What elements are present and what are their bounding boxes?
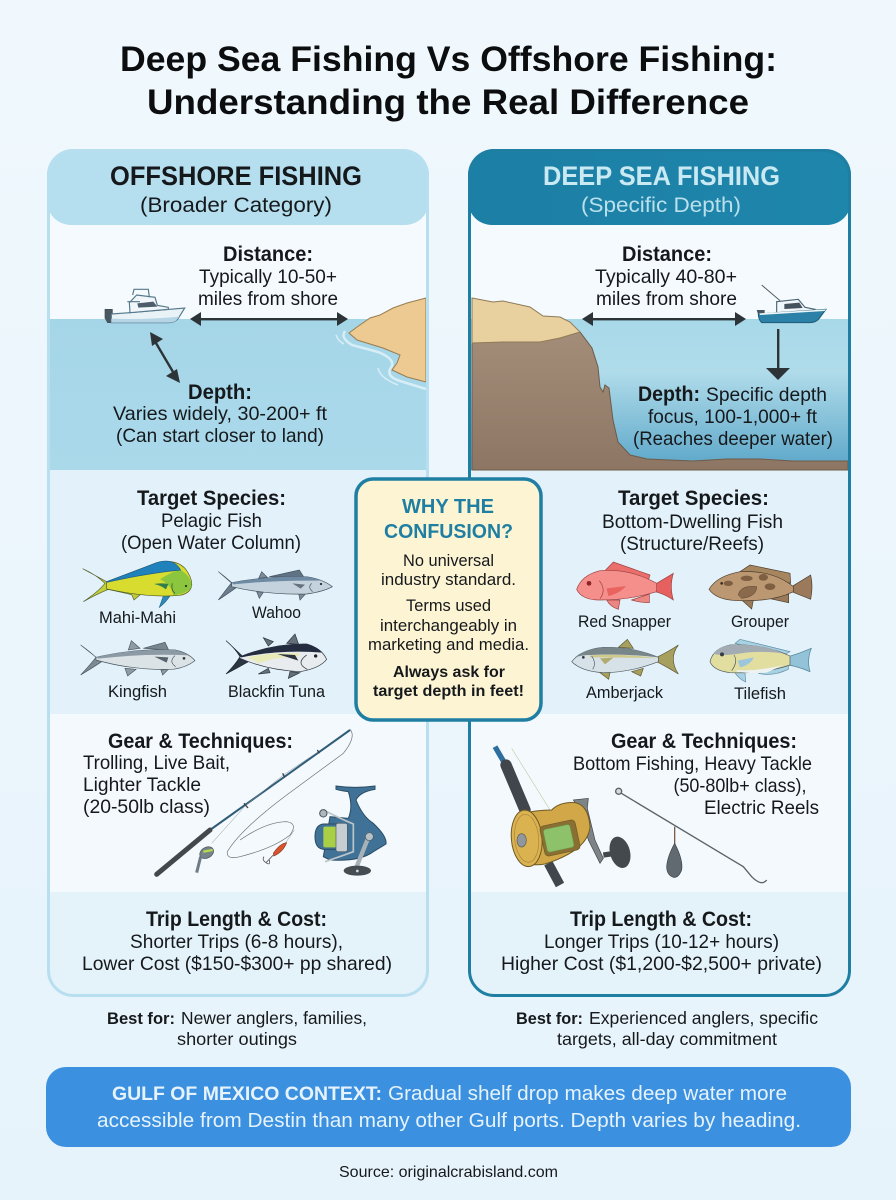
- icon: shoreline: [336, 298, 426, 389]
- title: Understanding the Real Difference: [147, 83, 749, 122]
- callout: why the confusion: interchangeably in: [380, 616, 517, 635]
- deep sea header: (Specific Depth): [581, 194, 741, 217]
- icon: fishing rod and lure: [157, 729, 352, 874]
- text: best for deep sea: Best for:: [516, 1009, 583, 1028]
- text: offshore trip length and cost: Lower Cost ($150-$300+ pp shared): [82, 953, 392, 975]
- text: offshore distance: Typically 10-50+: [199, 266, 337, 288]
- text: offshore fish labels: Blackfin Tuna: [228, 683, 326, 701]
- icon: red snapper: [577, 562, 673, 609]
- text: offshore target species: [121, 487, 301, 554]
- text: deep sea target species: Bottom-Dwelling Fish: [602, 511, 783, 533]
- banner: gulf of mexico context: accessible from Destin than many other Gulf ports. Depth varies by heading.: [97, 1109, 801, 1132]
- icon: amberjack: [572, 639, 678, 679]
- text: best for deep sea: Experienced anglers, specific: [589, 1008, 818, 1028]
- text: offshore distance: miles from shore: [198, 288, 338, 310]
- text: deep sea trip length and cost: Longer Trips (10-12+ hours): [544, 931, 779, 953]
- text: deep sea fish labels: Amberjack: [586, 684, 664, 702]
- text: deep sea fish labels: [578, 613, 789, 703]
- text: offshore depth: Varies widely, 30-200+ ft: [113, 403, 328, 425]
- icon: grouper: [709, 565, 812, 609]
- text: offshore depth: [113, 381, 328, 447]
- text: offshore target species: Pelagic Fish: [161, 510, 262, 532]
- text: best for offshore: Best for:: [107, 1009, 175, 1028]
- text: deep sea target species: (Structure/Reefs): [620, 533, 764, 555]
- callout: why the confusion: No universal: [403, 551, 494, 570]
- text: deep sea gear: Gear & Techniques:: [611, 730, 797, 753]
- text: deep sea fish labels: Grouper: [731, 613, 789, 631]
- source: Source: originalcrabisland.com: [339, 1164, 558, 1181]
- text: deep sea fish labels: Red Snapper: [578, 613, 671, 631]
- callout: why the confusion: WHY THE: [402, 496, 494, 518]
- icon: conventional reel and rod: [495, 747, 634, 885]
- text: deep sea fish labels: Tilefish: [734, 685, 786, 703]
- banner: gulf of mexico context: GULF OF MEXICO CONTEXT:: [112, 1083, 382, 1105]
- callout: why the confusion: Always ask for: [393, 664, 505, 681]
- text: offshore gear: Lighter Tackle: [83, 774, 201, 796]
- arrow: deep sea distance: [582, 312, 746, 326]
- banner: gulf of mexico context: Gradual shelf drop makes deep water more: [388, 1082, 787, 1105]
- text: best for offshore: Newer anglers, families,: [181, 1008, 367, 1028]
- text: deep sea gear: Electric Reels: [704, 797, 819, 819]
- text: deep sea depth: Specific depth: [706, 384, 827, 406]
- text: offshore fish labels: Kingfish: [108, 683, 167, 701]
- text: offshore fish labels: [99, 604, 326, 701]
- title: [120, 40, 777, 122]
- icon: wahoo: [218, 570, 332, 600]
- icon: offshore boat: [105, 289, 185, 323]
- deep sea header: DEEP SEA FISHING: [543, 161, 780, 191]
- text: deep sea trip length and cost: Higher Cost ($1,200-$2,500+ private): [501, 953, 822, 975]
- icon: tilefish: [710, 639, 811, 682]
- callout: why the confusion: marketing and media.: [368, 635, 529, 654]
- text: deep sea distance: miles from shore: [596, 288, 737, 310]
- text: deep sea target species: [602, 487, 783, 555]
- icon: continental shelf: [472, 298, 848, 470]
- text: offshore trip length and cost: [82, 908, 392, 975]
- banner: gulf of mexico context: [46, 1067, 851, 1147]
- text: offshore trip length and cost: Trip Length & Cost:: [146, 908, 327, 931]
- text: deep sea distance: Typically 40-80+: [595, 266, 737, 288]
- text: deep sea gear: Bottom Fishing, Heavy Tackle: [573, 753, 812, 775]
- text: offshore gear: (20-50lb class): [83, 796, 210, 818]
- icon: sinker rig: [616, 788, 767, 883]
- text: best for offshore: [107, 1008, 367, 1049]
- text: deep sea depth: (Reaches deeper water): [633, 428, 833, 450]
- text: deep sea gear: (50-80lb+ class),: [674, 775, 806, 797]
- text: offshore depth: (Can start closer to land): [116, 425, 324, 447]
- panel: offshore fishing: [47, 149, 429, 997]
- text: offshore depth: Depth:: [188, 381, 252, 404]
- icon: deep sea boat: [757, 285, 826, 323]
- text: deep sea depth: Depth:: [638, 383, 700, 406]
- callout: why the confusion: industry standard.: [381, 570, 516, 589]
- text: offshore fish labels: Wahoo: [252, 604, 301, 622]
- callout: why the confusion: [356, 479, 541, 720]
- offshore header: (Broader Category): [140, 194, 332, 217]
- text: deep sea depth: focus, 100-1,000+ ft: [648, 406, 818, 428]
- text: offshore fish labels: Mahi-Mahi: [99, 609, 176, 627]
- offshore header: [47, 149, 429, 225]
- icon: blackfin tuna: [226, 634, 327, 678]
- icon: kingfish: [81, 641, 195, 676]
- arrow: offshore depth: [150, 332, 180, 383]
- text: best for deep sea: targets, all-day commitment: [557, 1029, 777, 1049]
- text: offshore target species: (Open Water Column): [121, 532, 301, 554]
- callout: why the confusion: Terms used: [406, 596, 491, 615]
- text: best for offshore: shorter outings: [177, 1029, 297, 1049]
- offshore header: OFFSHORE FISHING: [110, 161, 362, 191]
- text: offshore trip length and cost: Shorter Trips (6-8 hours),: [130, 931, 343, 953]
- arrow: offshore distance: [190, 312, 348, 326]
- text: deep sea depth: [633, 383, 833, 450]
- text: deep sea trip length and cost: [501, 908, 822, 975]
- panel: deep sea fishing: [468, 149, 851, 997]
- text: offshore distance: [198, 243, 338, 310]
- text: deep sea gear: [573, 730, 819, 819]
- icon: spinning reel: [315, 786, 386, 876]
- text: deep sea trip length and cost: Trip Length & Cost:: [570, 908, 752, 931]
- deep sea header: [468, 149, 851, 225]
- text: best for deep sea: [516, 1008, 818, 1049]
- text: offshore distance: Distance:: [223, 243, 313, 266]
- text: deep sea distance: [595, 243, 737, 310]
- text: offshore gear: [83, 730, 293, 818]
- callout: why the confusion: target depth in feet!: [373, 683, 524, 700]
- title: Deep Sea Fishing Vs Offshore Fishing:: [120, 40, 777, 79]
- text: deep sea target species: Target Species:: [618, 487, 769, 510]
- callout: why the confusion: CONFUSION?: [384, 521, 513, 543]
- text: offshore target species: Target Species:: [137, 487, 286, 510]
- text: deep sea distance: Distance:: [622, 243, 712, 266]
- text: offshore gear: Trolling, Live Bait,: [83, 752, 230, 774]
- icon: mahi-mahi: [83, 561, 192, 607]
- text: offshore gear: Gear & Techniques:: [108, 730, 293, 753]
- arrow: deep sea depth: [766, 329, 790, 380]
